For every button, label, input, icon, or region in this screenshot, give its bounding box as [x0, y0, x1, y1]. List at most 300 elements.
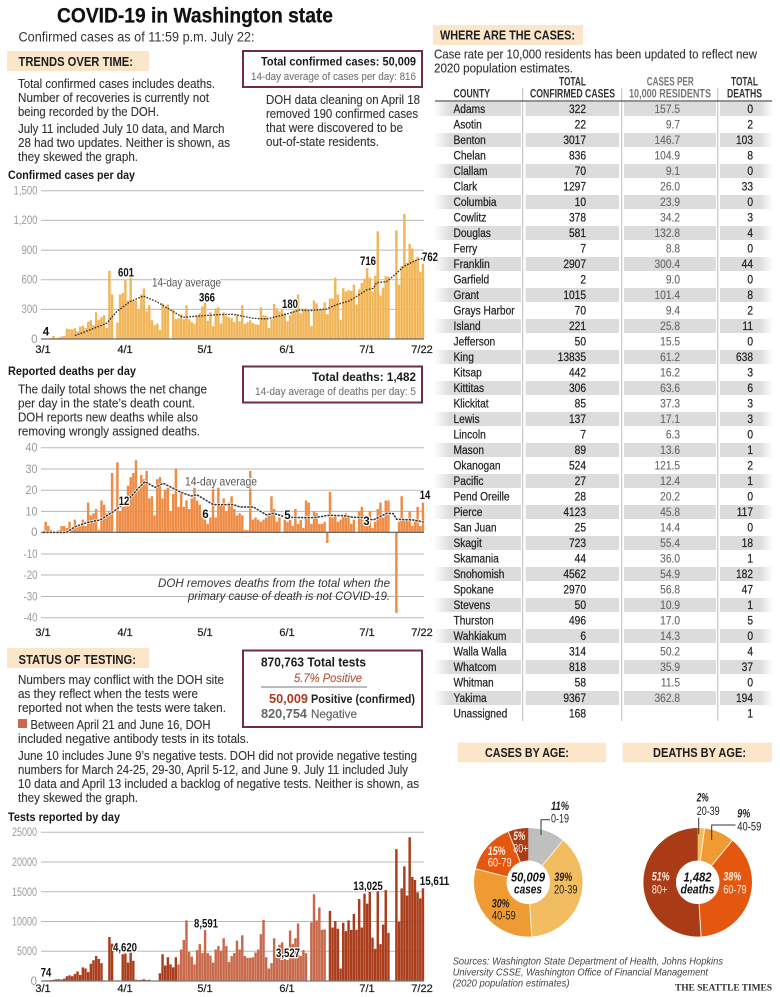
slice labels: 60-79 [723, 884, 747, 896]
callout: total confirmed cases: 14-day average of cases per day: 816 [251, 71, 416, 83]
heading: where are the cases: WHERE ARE THE CASES: [440, 28, 575, 42]
column: total deaths: 103 [736, 134, 753, 147]
text block: testing notes: 10 data and April 13 included a backlog of negative tests. Neither is shown, as [18, 777, 419, 791]
text block: trends notes: July 11 included July 10 data, and March [18, 122, 225, 136]
text block: trends notes: Total confirmed cases includes deaths. [18, 77, 215, 91]
bar chart: reported deaths per day: 40 [26, 442, 38, 454]
text block: deaths note: DOH reports new deaths while also [18, 411, 198, 425]
x axis labels: 5/1 [197, 983, 213, 995]
x axis labels: 7/22 [411, 983, 433, 995]
text block: case rate note [434, 47, 758, 75]
column: county names: Klickitat [454, 398, 489, 411]
column: cases per 10,000 residents: 6.3 [666, 429, 680, 442]
column: county names: Garfield [454, 274, 489, 287]
column: cases per 10,000 residents: 157.5 [654, 103, 680, 116]
column: cases per 10,000 residents: 13.6 [660, 444, 680, 457]
center label: 1,482 [684, 870, 712, 885]
slice labels: 20-39 [697, 806, 720, 818]
text block: case rate note: 2020 population estimates. [434, 61, 573, 75]
column: total confirmed cases: 7 [580, 429, 586, 442]
column: total deaths: 0 [747, 677, 753, 690]
column: county names: Okanogan [454, 460, 501, 473]
column: total deaths: 6 [747, 382, 753, 395]
column: cases per 10,000 residents: 45.8 [660, 506, 680, 519]
slice labels: 40-59 [492, 910, 516, 922]
callout: testing totals: 5.7% Positive [294, 671, 362, 685]
column: county names: Clallam [454, 165, 487, 178]
slice labels: 60-79 [488, 858, 512, 870]
column: total confirmed cases: 836 [569, 150, 586, 163]
column: county names: Spokane [454, 584, 494, 597]
value labels: 3,527 [276, 948, 300, 960]
column: county names: Thurston [454, 615, 494, 628]
bar chart: reported deaths per day: -30 [24, 592, 38, 604]
column: county names: Mason [454, 444, 484, 457]
x axis labels: 3/1 [35, 627, 51, 639]
x axis labels: 6/1 [279, 983, 295, 995]
value labels: 8,591 [194, 918, 219, 930]
column: total confirmed cases: 9367 [563, 692, 586, 705]
bar chart: confirmed cases per day: 900 [22, 245, 38, 257]
heading: cases by age: CASES BY AGE: [485, 745, 569, 760]
column: total confirmed cases: 314 [569, 646, 586, 659]
bar chart: tests reported by day: 5000 [17, 946, 37, 958]
column: total deaths: 182 [736, 568, 753, 581]
column: cases per 10,000 residents: 300.4 [654, 258, 680, 271]
slice labels: 80+ [513, 843, 529, 855]
column: county names: Douglas [454, 227, 491, 240]
column: total deaths: 3 [747, 212, 753, 225]
column: total confirmed cases: 10 [575, 196, 586, 209]
text block: testing notes: June 10 includes June 9’s negative tests. DOH did not provide negative testing [18, 749, 417, 763]
callout: total confirmed cases [243, 51, 422, 87]
value labels [43, 252, 438, 339]
bar chart: confirmed cases per day: 300 [22, 304, 38, 316]
subtitle: Confirmed cases as of 11:59 p.m. July 22: [18, 30, 254, 45]
column: cases per 10,000 residents: 26.0 [660, 181, 680, 194]
column: total confirmed cases: 322 [569, 103, 586, 116]
text block: testing notes: numbers for March 24-25, 29-30, April 5-12, and June 9. July 11 included July [18, 763, 409, 777]
bar chart: tests reported by day: 0 [31, 976, 37, 988]
text block: testing notes: included negative antibody tests in its totals. [18, 732, 249, 746]
column: county names: Franklin [454, 258, 490, 271]
column: total confirmed cases: 4562 [563, 568, 586, 581]
text block: DOH data cleaning: DOH data cleaning on April 18 [266, 93, 420, 107]
column: county names: Asotin [454, 119, 482, 132]
bar chart: tests reported by day: 15000 [12, 887, 37, 899]
text block: trends notes: they skewed the graph. [18, 150, 138, 164]
heading: deaths by age [623, 743, 772, 762]
bar chart: confirmed cases per day: 1,200 [14, 215, 38, 227]
text block: deaths note: The daily total shows the net change [18, 383, 207, 397]
column: total deaths: 2 [747, 305, 753, 318]
value labels: 4 [43, 327, 50, 339]
column: cases per 10,000 residents: 54.9 [660, 568, 680, 581]
column: cases per 10,000 residents: 37.3 [660, 398, 680, 411]
heading: trends over time [7, 51, 149, 71]
text block: DOH data cleaning [266, 93, 420, 149]
x axis labels: 7/22 [411, 627, 433, 639]
column: county names: Pacific [454, 475, 484, 488]
column: cases per 10,000 residents: 9.1 [666, 165, 680, 178]
column: total confirmed cases: 723 [569, 537, 586, 550]
bar chart: tests reported by day: 10000 [12, 916, 37, 928]
column: total deaths: 47 [742, 584, 753, 597]
value labels: 15,611 [420, 876, 450, 888]
table header: CONFIRMED CASES [530, 89, 615, 101]
callout: total deaths [243, 366, 422, 402]
text block: DOH data cleaning: that were discovered to be [266, 121, 403, 135]
column: county names [454, 103, 515, 721]
column: total deaths: 0 [747, 196, 753, 209]
column: county names: Pend Oreille [454, 491, 510, 504]
column: cases per 10,000 residents: 36.0 [660, 553, 680, 566]
slice labels: 51% [652, 872, 670, 884]
column: cases per 10,000 residents: 15.5 [660, 336, 680, 349]
bar chart: tests reported by day: 25000 [12, 827, 37, 839]
column: cases per 10,000 residents: 12.4 [660, 475, 680, 488]
value labels: 4,620 [113, 943, 137, 955]
callout: testing totals: 50,009 [269, 691, 308, 706]
column: total confirmed cases: 22 [575, 119, 586, 132]
column: cases per 10,000 residents: 17.1 [660, 413, 680, 426]
value labels: 366 [199, 293, 215, 305]
column: total confirmed cases: 168 [569, 708, 586, 721]
heading: cases by age [458, 743, 606, 762]
value labels: 601 [118, 268, 135, 280]
value labels: 13,025 [353, 881, 383, 893]
sources: Sources: Washington State Department of Health, Johns Hopkins [453, 955, 724, 967]
column: total deaths: 1 [747, 708, 753, 721]
callout: testing totals: Negative [311, 707, 357, 721]
column: total confirmed cases: 378 [569, 212, 586, 225]
slice labels: 38% [723, 872, 741, 884]
column: cases per 10,000 residents: 9.4 [666, 305, 680, 318]
column: total confirmed cases: 50 [575, 336, 586, 349]
column: total confirmed cases: 442 [569, 367, 586, 380]
column: county names: Kittitas [454, 382, 485, 395]
column: total confirmed cases: 524 [569, 460, 586, 473]
column: county names: Unassigned [454, 708, 507, 721]
column: county names: Adams [454, 103, 486, 116]
column: cases per 10,000 residents: 23.9 [660, 196, 680, 209]
slice labels [652, 793, 761, 896]
column: total deaths: 1 [747, 553, 753, 566]
center label [680, 870, 714, 897]
text block: DOH data cleaning: out-of-state residents. [266, 135, 379, 149]
column: cases per 10,000 residents: 17.0 [660, 615, 680, 628]
column: total deaths: 0 [747, 165, 753, 178]
column: cases per 10,000 residents: 14.4 [660, 522, 680, 535]
text block: trends notes [18, 77, 230, 164]
column: cases per 10,000 residents: 104.9 [654, 150, 680, 163]
column: total confirmed cases: 27 [575, 475, 586, 488]
column: total confirmed cases: 2 [580, 274, 586, 287]
bar chart: tests reported by day: 20000 [12, 857, 37, 869]
column: county names: Whitman [454, 677, 494, 690]
column: total deaths: 1 [747, 599, 753, 612]
column: county names: Kitsap [454, 367, 482, 380]
heading: where are the cases [433, 25, 583, 45]
slice labels: 9% [737, 808, 750, 820]
column: total deaths: 3 [747, 367, 753, 380]
bar chart: reported deaths per day: 0 [31, 527, 38, 539]
column: total deaths: 18 [742, 537, 753, 550]
value labels: 5 [284, 510, 291, 522]
column: cases per 10,000 residents: 8.8 [666, 243, 680, 256]
column: total deaths: 0 [747, 522, 753, 535]
column: total confirmed cases: 306 [569, 382, 586, 395]
column: county names: Grant [454, 289, 479, 302]
column: total deaths: 4 [747, 227, 753, 240]
chart heading: reported deaths per day: Reported deaths per day [8, 364, 136, 378]
value labels: 74 [41, 968, 52, 980]
x axis labels: 7/1 [359, 627, 375, 639]
column: total deaths: 0 [747, 243, 753, 256]
x axis labels: 7/1 [359, 983, 375, 995]
column: total confirmed cases: 2970 [563, 584, 586, 597]
slice labels: 80+ [652, 884, 668, 896]
x axis labels: 3/1 [35, 983, 51, 995]
value labels: 6 [202, 509, 209, 521]
column: total deaths: 8 [747, 289, 753, 302]
title: COVID-19 in Washington state [57, 4, 333, 28]
callout: testing totals: 820,754 [261, 706, 308, 721]
sources [453, 955, 724, 990]
donut chart: cases by age [476, 801, 578, 937]
slice labels: 20-39 [554, 884, 578, 896]
column: total confirmed cases: 221 [569, 320, 586, 333]
text block: DOH data cleaning: removed 190 confirmed cases [266, 107, 418, 121]
table header: TOTAL [731, 77, 758, 89]
column: total deaths: 3 [747, 413, 753, 426]
bar chart: reported deaths per day: -20 [24, 570, 38, 582]
x axis labels: 6/1 [279, 627, 295, 639]
column: total confirmed cases: 1297 [563, 181, 586, 194]
column: county names: Lewis [454, 413, 480, 426]
column: county names: King [454, 351, 474, 364]
column: county names: Snohomish [454, 568, 504, 581]
column: total confirmed cases: 1015 [563, 289, 586, 302]
column: total deaths: 1 [747, 475, 753, 488]
column: total deaths: 2 [747, 460, 753, 473]
slice labels: 40-59 [737, 822, 761, 834]
column: county names: Clark [454, 181, 478, 194]
column: cases per 10,000 residents: 55.4 [660, 537, 680, 550]
leader: 20-39 [698, 818, 700, 834]
x axis labels: 4/1 [117, 344, 133, 356]
leader: 40-59 [712, 825, 736, 840]
bar chart: reported deaths per day: -40 [24, 612, 38, 624]
slice labels: 2% [696, 793, 709, 805]
text block: deaths note: per day in the state’s death count. [18, 397, 195, 411]
annotation: 14-day average: 14-day average [152, 276, 221, 290]
text block: testing notes [18, 673, 419, 805]
column: cases per 10,000 residents [654, 103, 680, 705]
column: total confirmed cases: 89 [575, 444, 586, 457]
column: county names: Skagit [454, 537, 482, 550]
column: county names: Skamania [454, 553, 500, 566]
column: total deaths: 4 [747, 646, 753, 659]
bar chart: confirmed cases per day: 1,500 [14, 186, 38, 198]
text block: case rate note: Case rate per 10,000 residents has been updated to reflect new [434, 47, 758, 61]
column: cases per 10,000 residents: 25.8 [660, 320, 680, 333]
column: total confirmed cases: 496 [569, 615, 586, 628]
column: cases per 10,000 residents: 35.9 [660, 661, 680, 674]
line: 14-day average of deaths [43, 482, 423, 532]
bar chart: reported deaths per day [24, 442, 433, 639]
value labels [119, 490, 431, 528]
column: county names: Jefferson [454, 336, 495, 349]
column: total deaths: 33 [742, 181, 753, 194]
column: total confirmed cases: 58 [575, 677, 586, 690]
value labels: 12 [119, 496, 129, 508]
x axis labels: 7/1 [359, 344, 375, 356]
column: total confirmed cases [558, 103, 586, 721]
text block: trends notes: 28 had two updates. Neither is shown, as [18, 136, 230, 150]
column: total deaths: 5 [747, 615, 753, 628]
center label [511, 870, 546, 897]
bar chart: confirmed cases per day: 600 [22, 274, 38, 286]
column: total confirmed cases: 25 [575, 522, 586, 535]
column: county names: Benton [454, 134, 486, 147]
slice labels: 5% [513, 831, 525, 843]
text block: testing notes: Numbers may conflict with the DOH site [18, 673, 224, 687]
value labels: 180 [282, 299, 298, 311]
column: cases per 10,000 residents: 132.8 [654, 227, 680, 240]
x axis labels [35, 344, 433, 356]
column: total deaths [736, 103, 753, 721]
column: county names: Whatcom [454, 661, 497, 674]
column: total confirmed cases: 50 [575, 599, 586, 612]
column: total deaths: 0 [747, 274, 753, 287]
annotation: removed deaths: DOH removes deaths from the total when the [158, 576, 390, 590]
column: total deaths: 0 [747, 491, 753, 504]
column: county names: Grays Harbor [454, 305, 515, 318]
table: county data [433, 77, 773, 721]
column: cases per 10,000 residents: 34.2 [660, 212, 680, 225]
column: cases per 10,000 residents: 63.6 [660, 382, 680, 395]
x axis labels: 5/1 [197, 344, 213, 356]
column: cases per 10,000 residents: 20.2 [660, 491, 680, 504]
text block: trends notes: being recorded by the DOH. [18, 105, 159, 119]
column: total confirmed cases: 44 [575, 553, 586, 566]
column: total deaths: 1 [747, 444, 753, 457]
column: county names: Yakima [454, 692, 488, 705]
column: total deaths: 2 [747, 119, 753, 132]
x axis labels: 3/1 [35, 344, 51, 356]
chart heading: tests reported by day: Tests reported by day [8, 810, 120, 824]
column: county names: Columbia [454, 196, 497, 209]
column: total confirmed cases: 85 [575, 398, 586, 411]
column: county names: Cowlitz [454, 212, 486, 225]
bar chart: reported deaths per day: 20 [26, 485, 38, 497]
column: total confirmed cases: 13835 [558, 351, 586, 364]
text block: testing notes: as they reflect when the tests were [18, 687, 198, 701]
value labels: 3 [363, 516, 370, 528]
column: county names: Stevens [454, 599, 491, 612]
line: 14-day average of cases [75, 258, 423, 336]
callout: total confirmed cases: Total confirmed cases: 50,009 [261, 55, 416, 69]
text block: deaths note: removing wrongly assigned deaths. [18, 425, 200, 439]
callout: testing totals: 870,763 Total tests [261, 655, 366, 670]
column: county names: Walla Walla [454, 646, 507, 659]
column: total confirmed cases: 70 [575, 305, 586, 318]
annotation: removed deaths [158, 576, 390, 603]
slice labels [488, 801, 578, 922]
column: total deaths: 194 [736, 692, 753, 705]
credit: The Seattle Times: THE SEATTLE TIMES [675, 984, 772, 994]
column: total deaths: 0 [747, 336, 753, 349]
x axis labels: 5/1 [197, 627, 213, 639]
column: total deaths: 44 [742, 258, 753, 271]
donut chart: deaths by age [652, 793, 761, 937]
center label: 50,009 [511, 870, 546, 885]
column: county names: Ferry [454, 243, 478, 256]
sources: (2020 population estimates) [453, 978, 570, 990]
table header [454, 77, 762, 101]
annotation: removed deaths: primary cause of death is not COVID-19. [187, 589, 390, 603]
column: cases per 10,000 residents: 146.7 [654, 134, 680, 147]
text block: trends notes: Number of recoveries is currently not [18, 91, 209, 105]
chart heading: confirmed cases per day: Confirmed cases per day [8, 168, 135, 182]
x axis labels: 4/1 [117, 627, 133, 639]
column: cases per 10,000 residents: 9.0 [666, 274, 680, 287]
column: county names: Chelan [454, 150, 486, 163]
column: total confirmed cases: 3017 [563, 134, 586, 147]
table header: COUNTY [454, 89, 490, 101]
column: total deaths: 37 [742, 661, 753, 674]
x axis labels: 6/1 [279, 344, 295, 356]
x axis labels: 4/1 [117, 983, 133, 995]
column: total deaths: 0 [747, 630, 753, 643]
column: total confirmed cases: 137 [569, 413, 586, 426]
table header: TOTAL [559, 77, 586, 89]
column: county names: Pierce [454, 506, 482, 519]
heading: trends over time: TRENDS OVER TIME: [18, 54, 133, 69]
bar chart: confirmed cases per day [14, 186, 438, 356]
annotation: 14-day average: 14-day average [185, 475, 257, 489]
x axis labels [35, 627, 433, 639]
column: county names: Lincoln [454, 429, 486, 442]
column: total deaths: 0 [747, 103, 753, 116]
column: total confirmed cases: 818 [569, 661, 586, 674]
callout: testing totals [243, 650, 422, 727]
column: cases per 10,000 residents: 61.2 [660, 351, 680, 364]
column: total deaths: 3 [747, 398, 753, 411]
column: county names: Island [454, 320, 481, 333]
value labels: 762 [422, 252, 438, 264]
column: total deaths: 11 [742, 320, 753, 333]
bar chart: tests reported by day [12, 827, 450, 995]
table header: 10,000 RESIDENTS [629, 89, 711, 101]
x axis labels [35, 983, 433, 995]
slice labels: 15% [488, 846, 506, 858]
column: total deaths: 117 [737, 506, 753, 519]
bar chart: reported deaths per day: 10 [26, 506, 38, 518]
center label: cases [514, 882, 542, 897]
column: total deaths: 8 [747, 150, 753, 163]
column: cases per 10,000 residents: 10.9 [660, 599, 680, 612]
value labels: 716 [360, 256, 376, 268]
column: cases per 10,000 residents: 56.8 [660, 584, 680, 597]
callout: testing totals: Positive (confirmed) [311, 692, 415, 706]
column: total confirmed cases: 581 [569, 227, 586, 240]
sources: University CSSE, Washington Office of Financial Management [453, 967, 709, 979]
column: total confirmed cases: 4123 [563, 506, 586, 519]
slice labels: 11% [551, 801, 569, 813]
column: total confirmed cases: 70 [575, 165, 586, 178]
